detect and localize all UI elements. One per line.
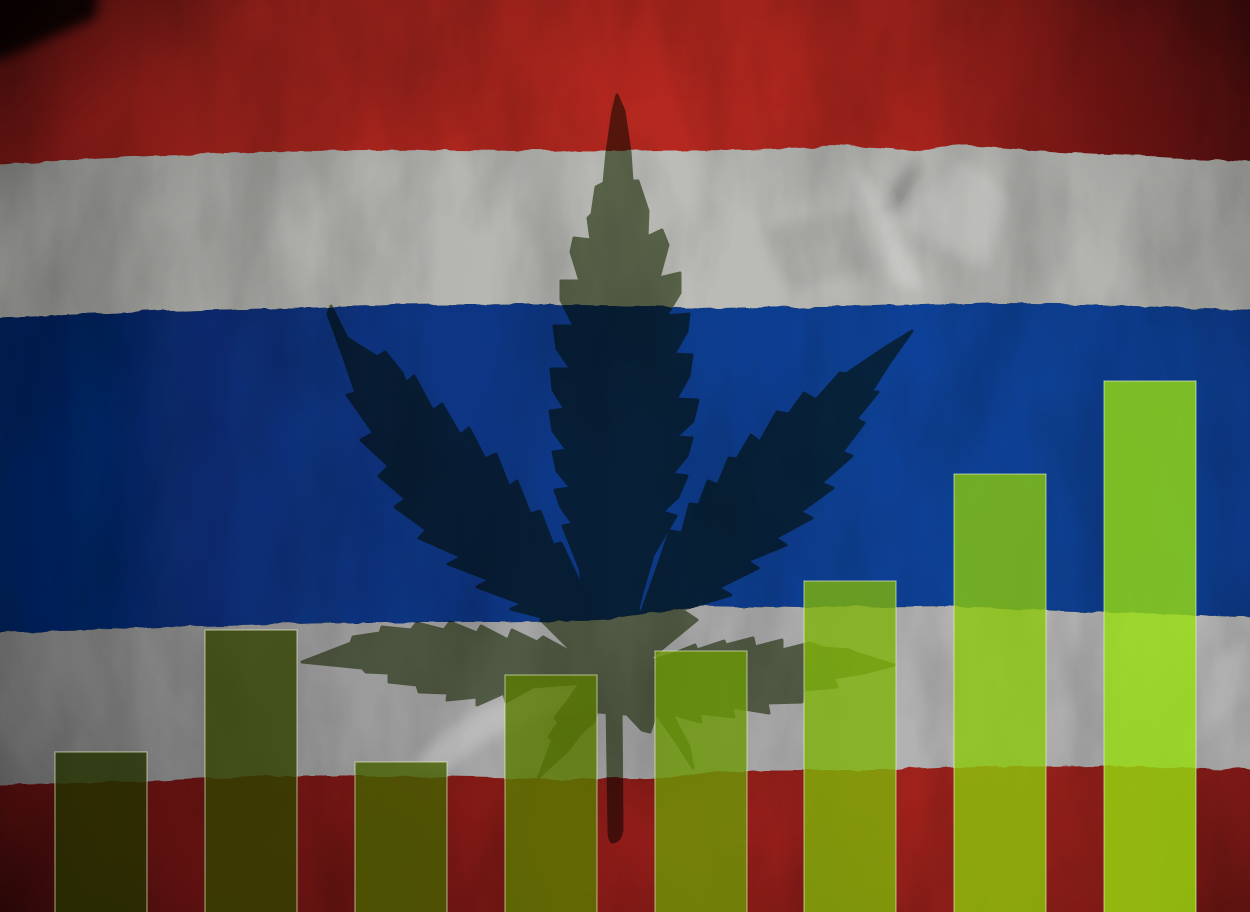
band: lower white [0, 606, 1250, 785]
leaflet: upper left [328, 306, 590, 618]
band: upper white [0, 144, 1250, 319]
leaflet: upper right [641, 331, 912, 618]
bar chart: rising green bars [55, 381, 1196, 912]
bar 6 [804, 581, 896, 912]
band: lower red [0, 730, 1250, 912]
leaf: stem [607, 705, 622, 842]
cannabis leaf silhouette [302, 95, 912, 842]
dark corner fold [0, 0, 102, 60]
bar 8 [1104, 381, 1196, 912]
leaflet: horizontal and small right [625, 638, 894, 768]
band: blue [0, 303, 1250, 633]
bar 4 [505, 675, 597, 912]
crease highlights on white bands [412, 155, 1250, 770]
bar 2 [205, 630, 297, 912]
leaflet: centre [550, 95, 698, 650]
leaf: central fan [541, 612, 697, 714]
bar 5 [655, 651, 747, 912]
bar 7 [954, 474, 1046, 912]
leaflet: horizontal left [302, 622, 596, 705]
leaflet: small lower left [538, 681, 600, 778]
bar 1 [55, 752, 147, 912]
bar 3 [355, 762, 447, 912]
band: red base layer [0, 0, 1250, 220]
